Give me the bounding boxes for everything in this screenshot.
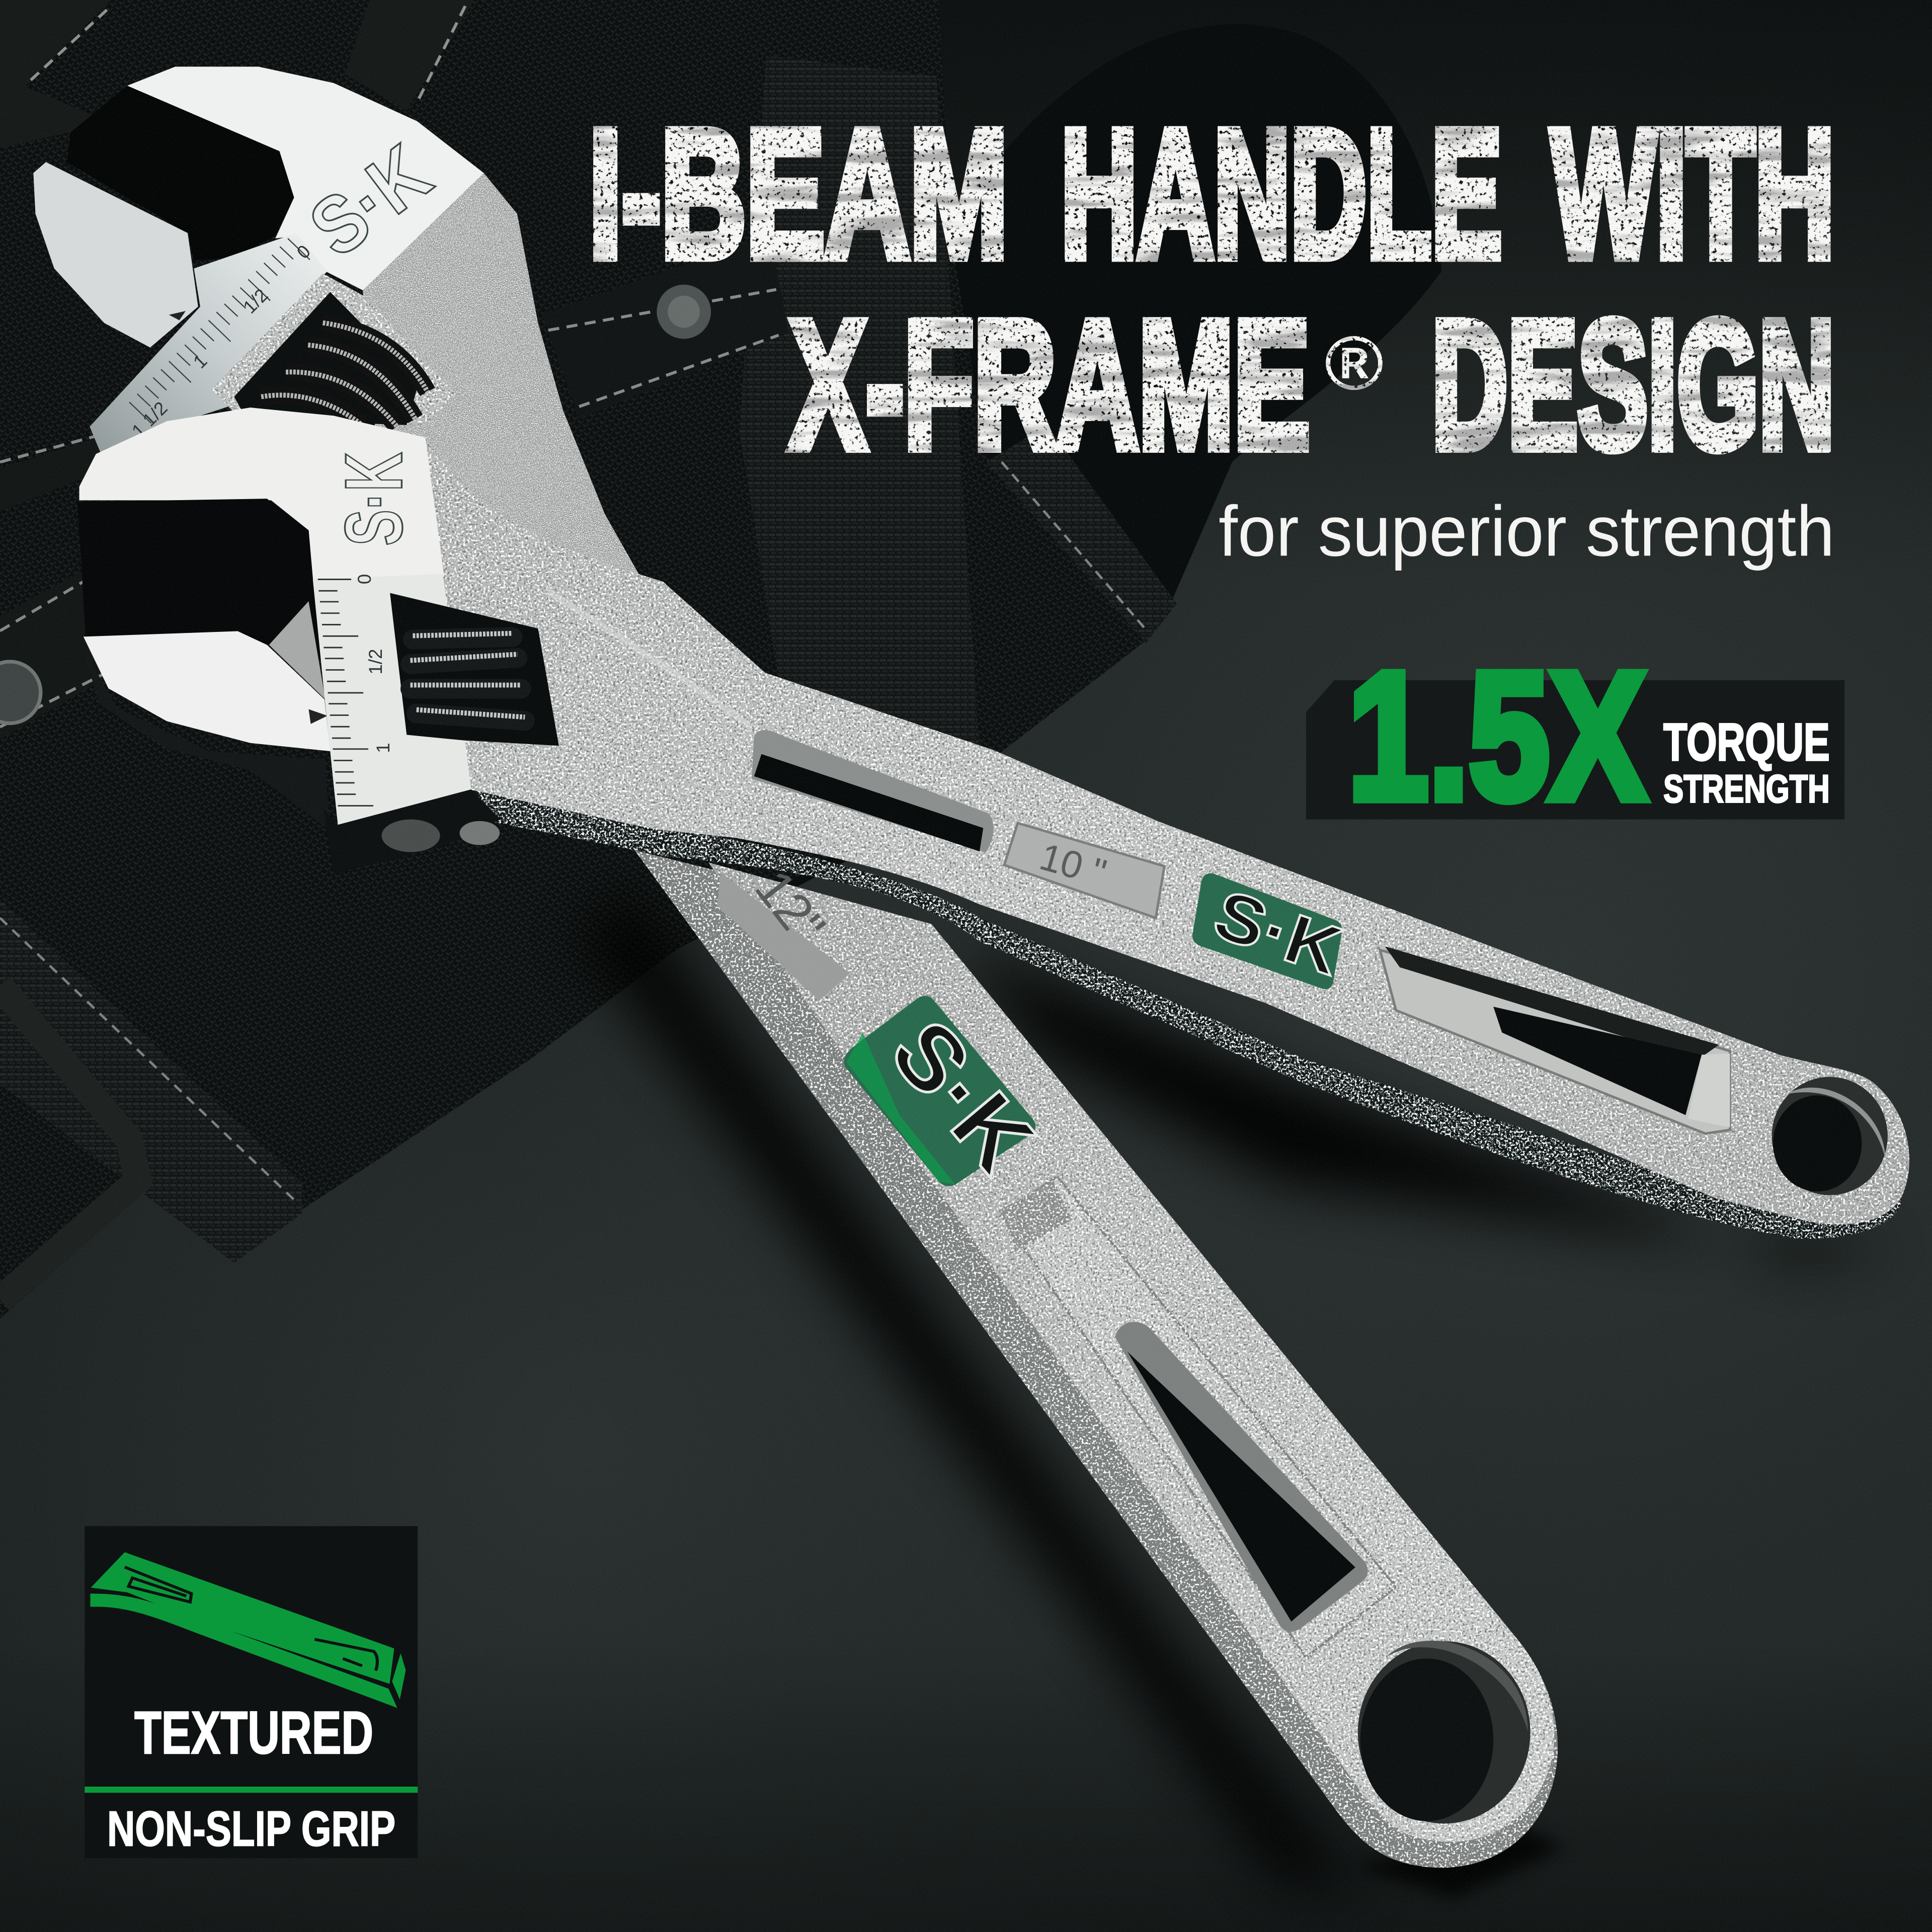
title: I-beam handle with X-Frame design: I-BEAM (589, 93, 1008, 295)
front scale numbers: 1 (373, 743, 393, 753)
back scale numbers: 1/2 (239, 285, 272, 317)
non-slip grip label: NON-SLIP GRIP (107, 1801, 395, 1857)
jaw marker (169, 311, 186, 320)
12 inch size marking (717, 859, 850, 1001)
strength label: STRENGTH (1663, 766, 1830, 811)
upper jaw (127, 66, 484, 290)
central vertical strap (739, 55, 980, 754)
front badge: S·K: S·K (1205, 875, 1351, 990)
callout: 1.5X torque strength (1306, 635, 1844, 837)
back worm window (212, 274, 456, 426)
end hole (1358, 1641, 1531, 1823)
back badge: S·K: S·K (871, 1001, 1054, 1191)
lower diagonal strap (0, 900, 302, 1263)
handle recess and slot (1380, 946, 1730, 1134)
lower jaw (84, 631, 331, 751)
tool bag (0, 0, 1441, 1318)
back head logo: S·K (294, 128, 447, 274)
worm threads (261, 323, 428, 426)
buckle (0, 986, 138, 1300)
green divider (85, 1787, 418, 1793)
upper jaw (79, 408, 444, 580)
10 inch wrench (front) (77, 408, 1909, 1239)
icon: green handle (90, 1552, 406, 1708)
lower jaw (33, 162, 198, 348)
back scale numbers: 0 (293, 241, 314, 263)
front scale numbers (354, 574, 393, 753)
sliding scale (313, 574, 471, 825)
sliding scale (90, 233, 328, 457)
back wrench head (33, 66, 676, 705)
1.5X figure: 1.5X (1348, 635, 1647, 837)
end hole (1772, 1077, 1888, 1195)
base bolts (323, 789, 501, 874)
left rivet (0, 662, 41, 723)
title: I-beam handle with X-Frame design: ® (1325, 321, 1384, 406)
worm window (390, 593, 559, 746)
scale ticks (318, 580, 373, 806)
front worm threads (411, 633, 525, 721)
scale ticks (129, 238, 310, 423)
subtitle: for superior strength (1219, 491, 1835, 571)
front wrench head (77, 408, 559, 874)
panel background (85, 1526, 418, 1858)
front scale numbers: 0 (354, 574, 375, 584)
left stitched straps (0, 0, 474, 739)
back scale numbers: 1 (189, 351, 211, 372)
back scale numbers (128, 241, 314, 441)
title: I-beam handle with X-Frame design (589, 93, 1835, 486)
10 inch size marking: 10 " (1035, 835, 1111, 895)
back scale numbers: 1 1/2 (128, 397, 172, 441)
front head logo: S·K (329, 452, 419, 546)
torque label: TORQUE (1663, 713, 1830, 772)
jaw opening (67, 86, 294, 260)
jaw bevel (269, 601, 326, 699)
callout background (1306, 680, 1844, 820)
lower jaw side (82, 645, 330, 830)
jaw opening (77, 499, 321, 661)
title: I-beam handle with X-Frame design: X-FRAME (790, 284, 1310, 486)
neck ridge highlight (548, 592, 752, 727)
cast neck (363, 173, 676, 705)
textured label: TEXTURED (134, 1699, 373, 1766)
handle recess and slot (1001, 1177, 1396, 1657)
upper strap with stitching (542, 234, 788, 419)
title: I-beam handle with X-Frame design: HANDLE (1061, 93, 1502, 295)
12 inch size marking: 12" (744, 859, 837, 954)
10 inch size marking (1004, 823, 1164, 918)
rivet (657, 285, 711, 339)
front wrench handle (407, 437, 1909, 1225)
diagonal stitched strap (986, 425, 1177, 643)
panel: textured non-slip grip (85, 1526, 418, 1858)
front wrench dark side wall (471, 790, 1901, 1239)
front scale numbers: 1/2 (365, 649, 386, 675)
12 inch wrench (back) (33, 66, 1558, 1868)
jaw marker (308, 709, 328, 724)
wrench shadows (579, 887, 1897, 1897)
upper slot (752, 730, 994, 853)
back wrench handle (634, 850, 1558, 1868)
